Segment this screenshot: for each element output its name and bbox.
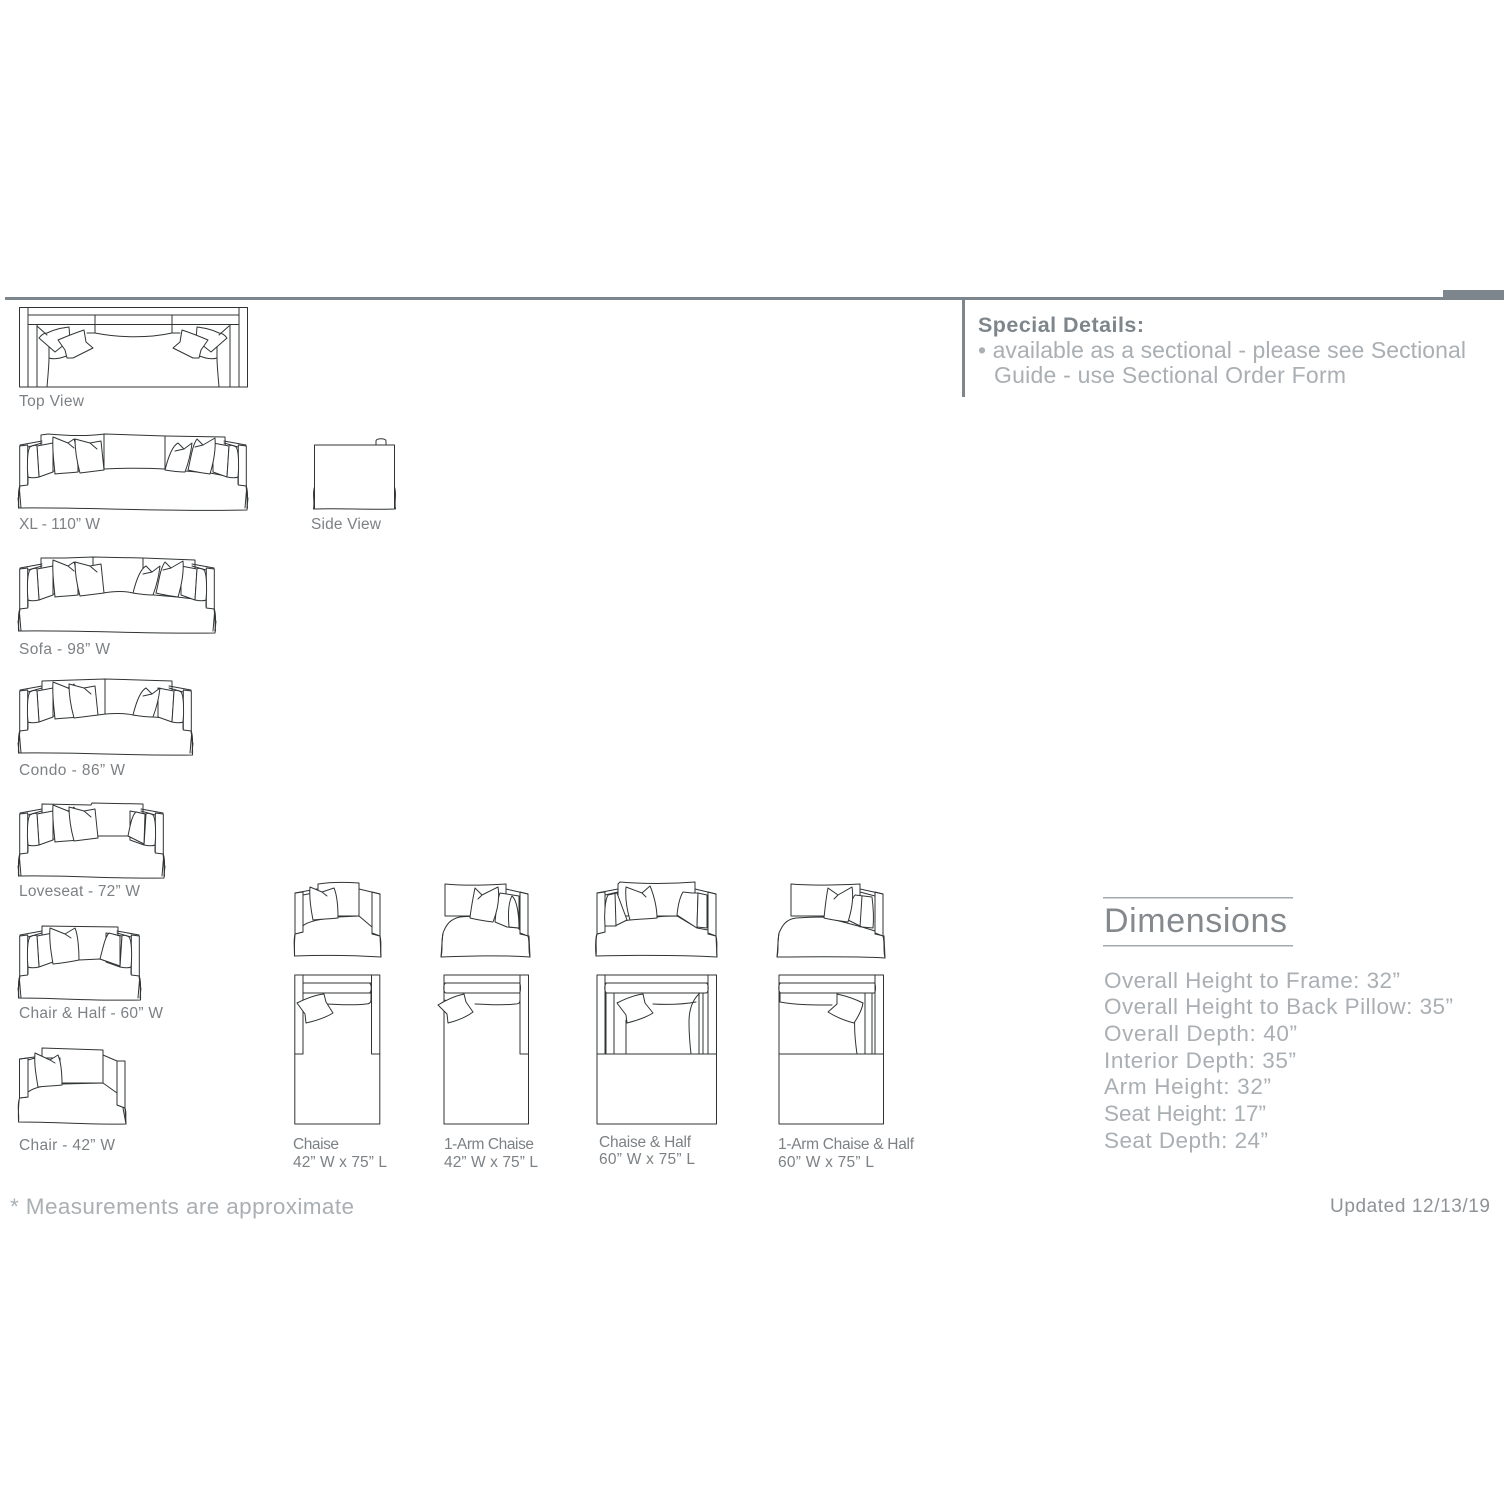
label: chaise: Chaise — [293, 1136, 339, 1153]
icon: 1-arm chaise front — [441, 884, 530, 957]
text: overall height to frame: Overall Height to Frame: 32” — [1104, 968, 1400, 993]
icon: XL sofa front — [18, 434, 248, 510]
icon: chaise and half top — [597, 975, 716, 1124]
label: chair and half: Chair & Half - 60” W — [19, 1005, 163, 1022]
icon: condo front — [18, 679, 193, 755]
label: side view: Side View — [311, 516, 382, 533]
label: 1-arm chaise and half: 1-Arm Chaise & Half — [778, 1136, 915, 1153]
text: sectional note line 2: Guide - use Sectional Order Form — [994, 362, 1346, 388]
label: sofa: Sofa - 98” W — [19, 641, 110, 658]
header rule — [5, 290, 1504, 300]
label: 1-arm chaise: 1-Arm Chaise — [444, 1136, 534, 1153]
label: chaise and half: Chaise & Half — [599, 1134, 692, 1151]
text: overall height to back pillow: Overall Height to Back Pillow: 35” — [1104, 994, 1453, 1019]
text: overall depth: Overall Depth: 40” — [1104, 1021, 1297, 1046]
label: chair: Chair - 42” W — [19, 1137, 115, 1154]
icon: sofa front — [18, 557, 216, 633]
panel: special details — [962, 300, 1466, 397]
icon: top view of sofa — [20, 308, 248, 387]
text: interior depth: Interior Depth: 35” — [1104, 1048, 1296, 1073]
label: XL: XL - 110” W — [19, 516, 100, 533]
label: top view: Top View — [19, 393, 85, 410]
text: seat depth: Seat Depth: 24” — [1104, 1128, 1268, 1153]
text: seat height: Seat Height: 17” — [1104, 1101, 1266, 1126]
icon: chair and half front — [18, 926, 141, 1000]
footnote: * Measurements are approximate — [10, 1194, 354, 1219]
icon: 1-arm chaise and half front — [777, 884, 885, 958]
icon: chair front — [18, 1048, 126, 1124]
heading: special details: Special Details: — [978, 313, 1144, 337]
label: loveseat: Loveseat - 72” W — [19, 883, 140, 900]
label: condo: Condo - 86” W — [19, 762, 125, 779]
icon: loveseat front — [18, 803, 165, 878]
icon: 1-arm chaise top — [438, 975, 528, 1124]
label: chaise and half size: 60” W x 75” L — [599, 1151, 695, 1168]
label: chaise size: 42” W x 75” L — [293, 1154, 387, 1171]
panel: dimensions — [1103, 897, 1453, 1153]
text: arm height: Arm Height: 32” — [1104, 1074, 1271, 1099]
icon: 1-arm chaise and half top — [779, 975, 884, 1124]
icon: chaise front — [294, 882, 381, 957]
icon: chaise top — [295, 975, 380, 1124]
label: 1-arm chaise size: 42” W x 75” L — [444, 1154, 538, 1171]
heading: dimensions: Dimensions — [1104, 902, 1287, 940]
updated date: Updated 12/13/19 — [1330, 1196, 1490, 1217]
text: sectional note: • available as a sectional - please see Sectional — [978, 337, 1466, 363]
icon: side view — [313, 439, 396, 509]
icon: chaise and half front — [596, 882, 717, 957]
label: 1-arm chaise and half size: 60” W x 75” L — [778, 1154, 874, 1171]
